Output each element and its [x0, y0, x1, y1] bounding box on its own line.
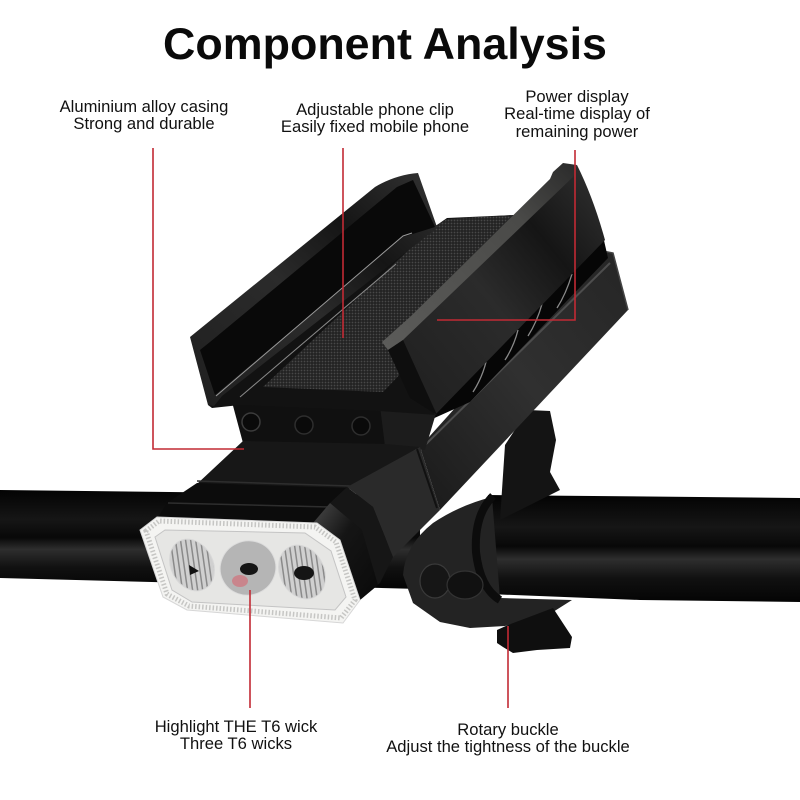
- label: rotary buckle: Adjust the tightness of the buckle: [386, 737, 630, 756]
- label: T6 wick: Highlight THE T6 wick: [155, 717, 318, 736]
- lamp side face: [313, 503, 378, 600]
- LED reflection: [232, 575, 248, 587]
- screw centre: [295, 416, 313, 434]
- left jaw inner channel: [200, 180, 435, 395]
- right jaw top rail: [382, 163, 577, 350]
- bike light and phone holder: [140, 163, 628, 653]
- screw right: [352, 417, 370, 435]
- callout: T6 wick line: [249, 590, 251, 708]
- rubber collar: [330, 487, 393, 600]
- right clip jaw: [382, 163, 605, 415]
- handlebar tube: [0, 490, 800, 602]
- lamp head lower band: [157, 483, 350, 525]
- block below right jaw: [376, 404, 437, 450]
- heat-sink slots: [430, 236, 608, 420]
- lens centre: [211, 532, 285, 604]
- lens left: [161, 531, 223, 599]
- grey band groove: [417, 449, 437, 508]
- LED left: [189, 565, 199, 575]
- bar clamp: [403, 496, 572, 628]
- label: T6 wick: Three T6 wicks: [180, 734, 292, 753]
- lamp head top surface: [197, 441, 420, 490]
- bezel ribbing: [146, 521, 355, 618]
- body ridge highlight: [420, 263, 610, 450]
- power bank body: [420, 236, 628, 510]
- callout: phone clip line: [342, 148, 344, 338]
- callout: power display line: [437, 150, 575, 320]
- label: phone clip: Easily fixed mobile phone: [281, 117, 469, 136]
- body end cap edge: [597, 250, 628, 310]
- label: power display: remaining power: [516, 122, 639, 141]
- clamp screw boss left: [420, 564, 450, 598]
- screw left: [242, 413, 260, 431]
- grey band on body: [347, 447, 440, 557]
- title: Component Analysis: [163, 19, 607, 69]
- callout: rotary buckle line: [507, 626, 509, 708]
- lamp front bezel: [140, 517, 360, 623]
- lens right: [269, 537, 335, 607]
- lamp head seam: [168, 481, 350, 507]
- left clip jaw: [190, 173, 437, 406]
- rear clamp behind body: [500, 410, 560, 520]
- LED centre: [240, 563, 258, 575]
- LED right: [294, 566, 314, 580]
- tightening knob: [497, 608, 572, 653]
- left rail highlight: [240, 264, 396, 397]
- bezel inner plate: [155, 530, 346, 610]
- label: aluminium casing: Strong and durable: [73, 114, 215, 133]
- label: power display: Real-time display of: [504, 104, 650, 123]
- label: power display: Power display: [525, 87, 629, 106]
- clamp screw boss right: [447, 571, 483, 599]
- left jaw inner highlight: [216, 233, 412, 396]
- label: rotary buckle: Rotary buckle: [457, 720, 559, 739]
- slot fins: [473, 274, 572, 392]
- label: aluminium casing: Aluminium alloy casing: [60, 97, 228, 116]
- holder base plate: [208, 215, 515, 415]
- right jaw lip: [388, 340, 437, 415]
- mounting block with screws: [232, 402, 385, 446]
- clamp ring on tube: [476, 496, 500, 600]
- label: phone clip: Adjustable phone clip: [296, 100, 454, 119]
- rubber mesh pad: [263, 215, 513, 392]
- callout: casing line: [153, 148, 244, 449]
